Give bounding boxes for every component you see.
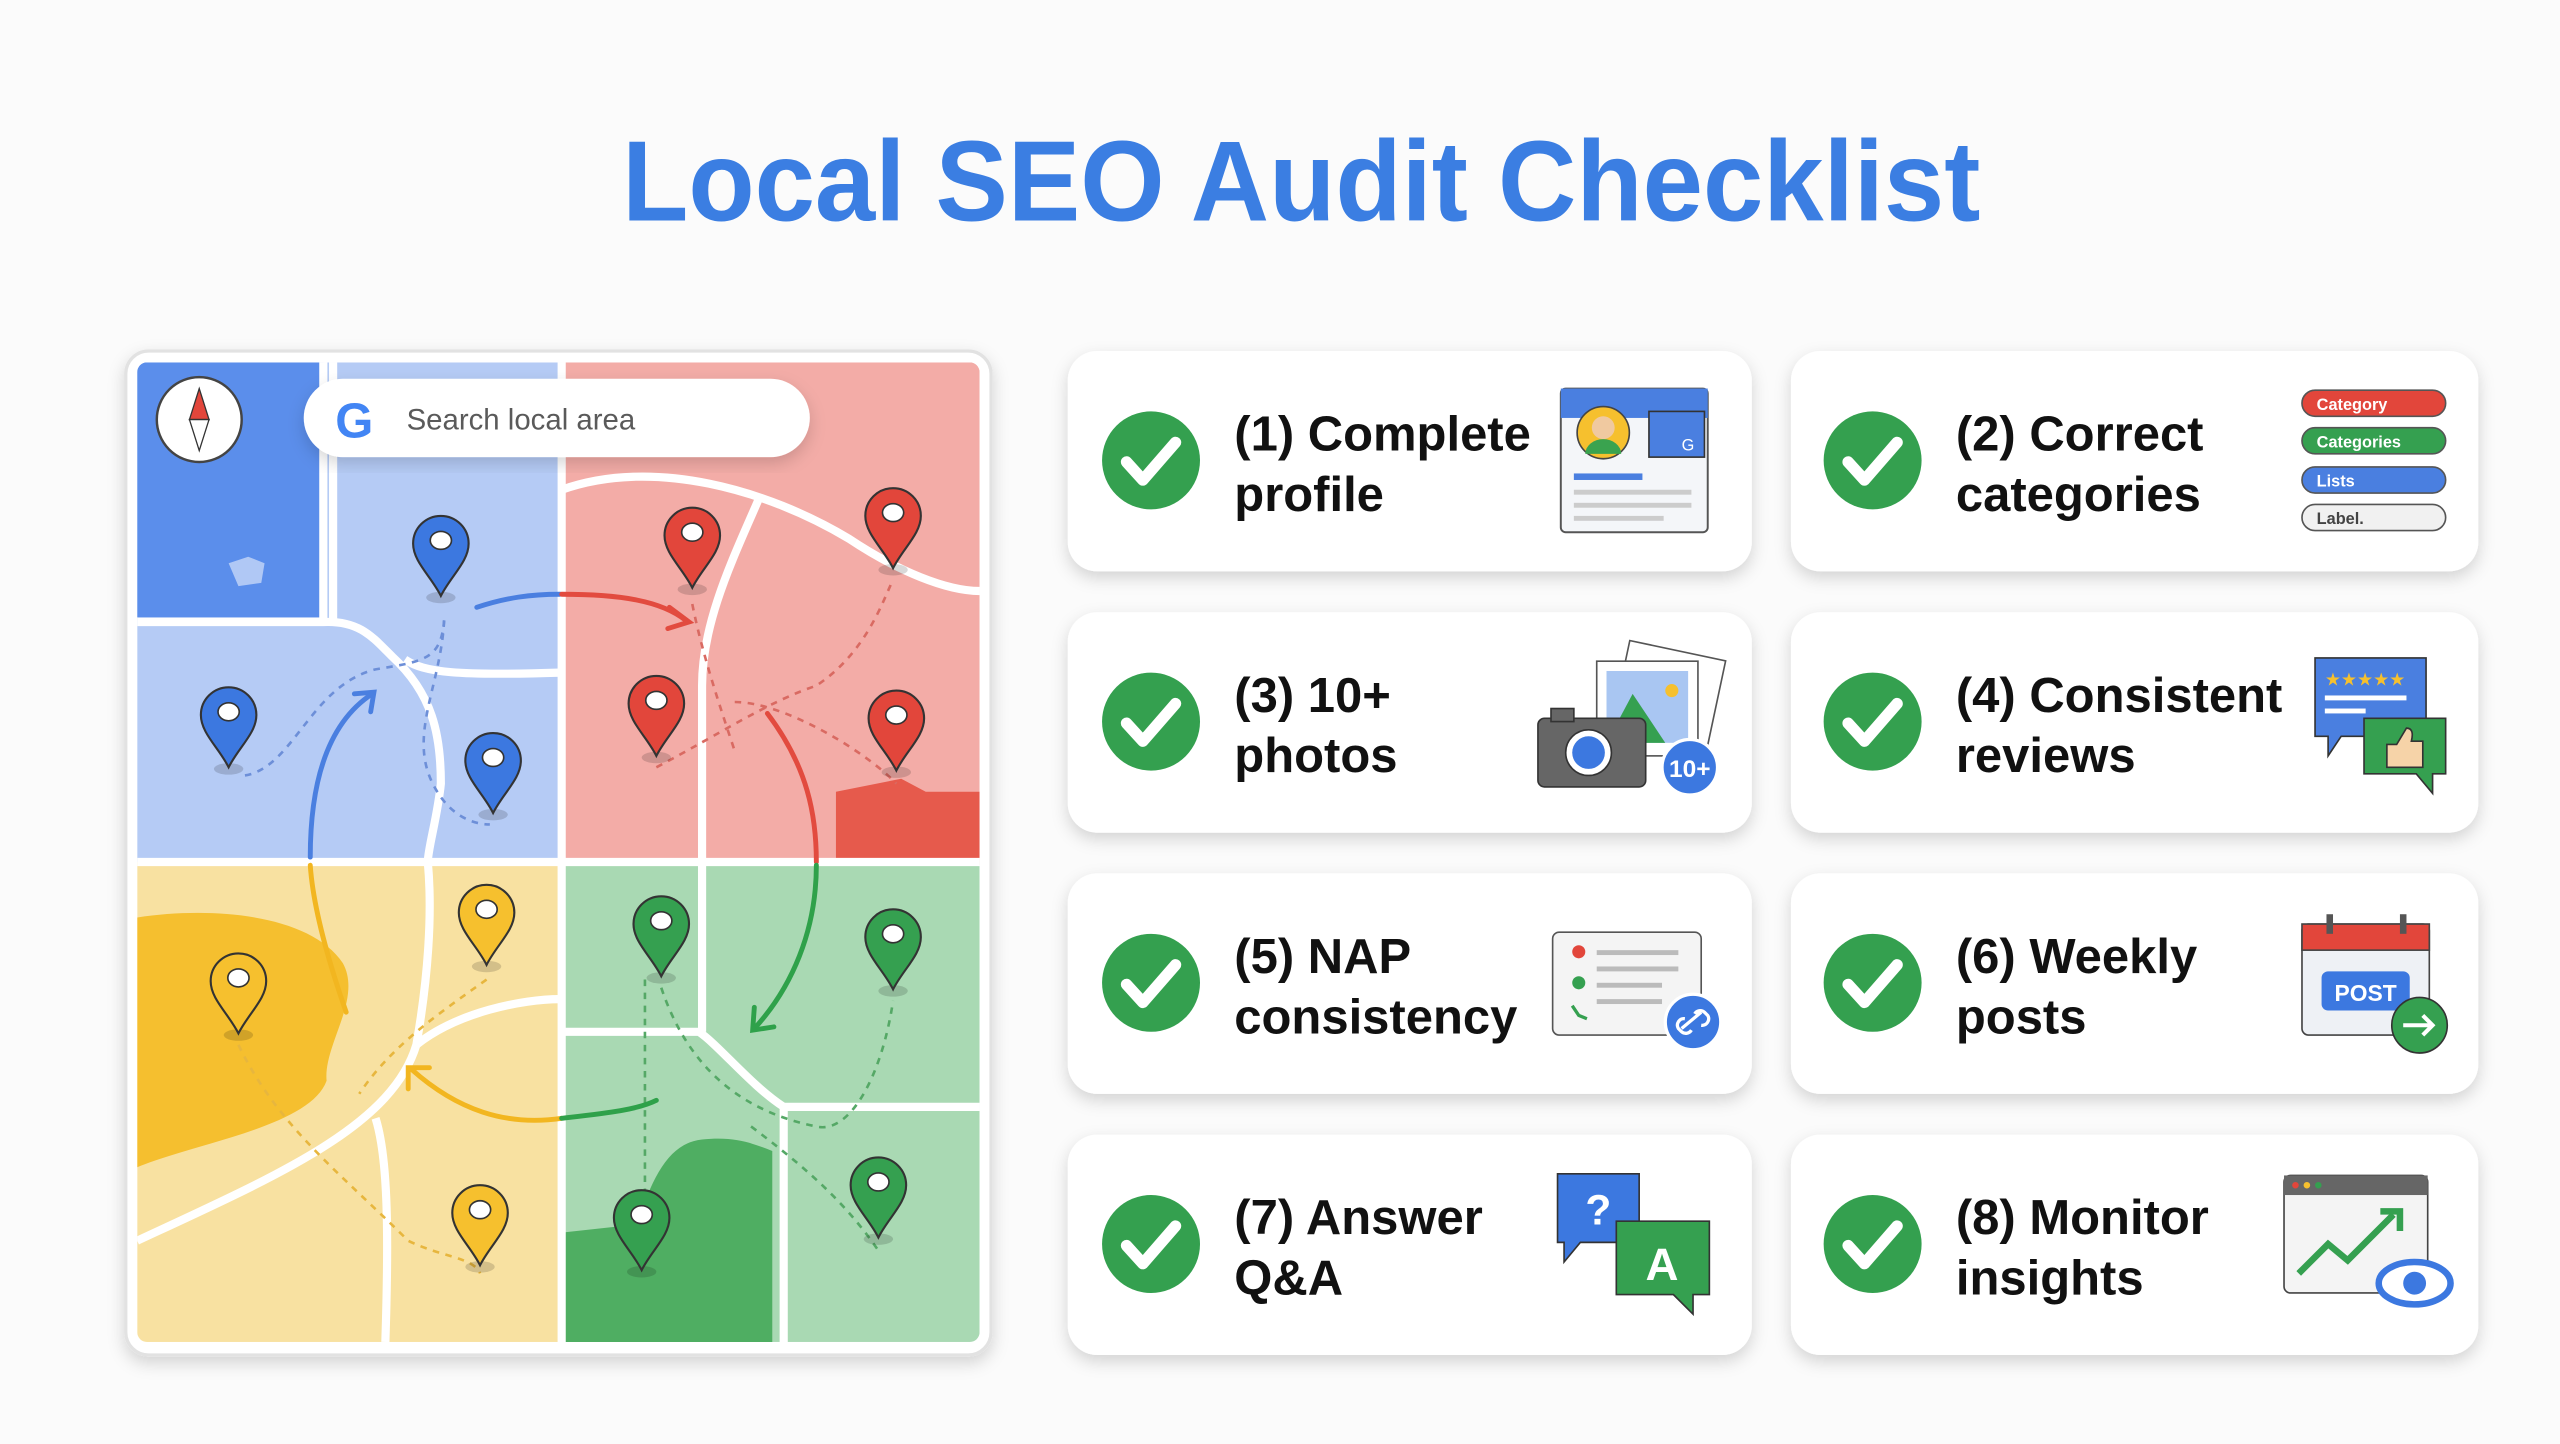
icon: camera photos: [1538, 641, 1726, 795]
icon: Q&A bubbles: A: [1646, 1239, 1679, 1290]
card 8: [1791, 1135, 2478, 1355]
search bar: [304, 379, 810, 457]
quadrant green: [562, 862, 980, 1342]
card 6: (6) Weekly: [1956, 930, 2197, 984]
icon: insights chart: [2284, 1175, 2451, 1304]
quadrant red: [562, 362, 980, 865]
icon: Q&A bubbles: [1558, 1174, 1709, 1314]
icon: calendar post: POST: [2335, 980, 2397, 1006]
icon: compass: [157, 377, 242, 462]
icon: category pills: Category: [2317, 396, 2387, 414]
card 7: Q&A: [1234, 1252, 1343, 1306]
search bar: Search local area: [407, 403, 636, 436]
quadrant blue: [137, 362, 562, 862]
card 5: [1068, 873, 1752, 1094]
icon: Q&A bubbles: ?: [1585, 1186, 1611, 1233]
card 2: categories: [1956, 468, 2201, 522]
icon: category pills: [2302, 390, 2446, 531]
card 1: (1) Complete: [1234, 408, 1531, 462]
roads: [137, 362, 980, 1342]
card 4: reviews: [1956, 729, 2136, 783]
arrows: [310, 594, 816, 1120]
card 4: (4) Consistent: [1956, 669, 2282, 723]
card 6: posts: [1956, 990, 2086, 1044]
icon: category pills: Lists: [2317, 473, 2355, 491]
icon: profile card: G: [1682, 437, 1694, 455]
panel: map: [126, 351, 991, 1355]
card 3: [1068, 612, 1752, 833]
quadrant yellow: [137, 862, 562, 1342]
card 8: insights: [1956, 1252, 2144, 1306]
dashed routes: [238, 580, 896, 1273]
title: Local SEO Audit Checklist: [622, 118, 1980, 245]
icon: category pills: Label.: [2317, 510, 2364, 528]
icon: review bubbles: ★★★★★: [2325, 670, 2405, 690]
card 8: (8) Monitor: [1956, 1191, 2209, 1245]
card 6: [1791, 873, 2478, 1094]
card 5: (5) NAP: [1234, 930, 1411, 984]
card 2: [1791, 351, 2478, 571]
card 3: photos: [1234, 729, 1397, 783]
card 2: (2) Correct: [1956, 408, 2204, 462]
card 1: profile: [1234, 468, 1384, 522]
card 7: (7) Answer: [1234, 1191, 1483, 1245]
icon: calendar post: [2302, 914, 2447, 1053]
icon: NAP document: [1553, 932, 1721, 1050]
card 5: consistency: [1234, 990, 1517, 1044]
card 4: [1791, 612, 2478, 833]
card 7: [1068, 1135, 1752, 1355]
card 1: [1068, 351, 1752, 571]
icon: camera photos: 10+: [1669, 756, 1711, 783]
icon: review bubbles: [2315, 658, 2446, 793]
icon: category pills: Categories: [2317, 433, 2401, 451]
icon: profile card: [1561, 389, 1708, 532]
search bar: G: [335, 395, 373, 449]
card 3: (3) 10+: [1234, 669, 1391, 723]
pins: [201, 516, 521, 820]
